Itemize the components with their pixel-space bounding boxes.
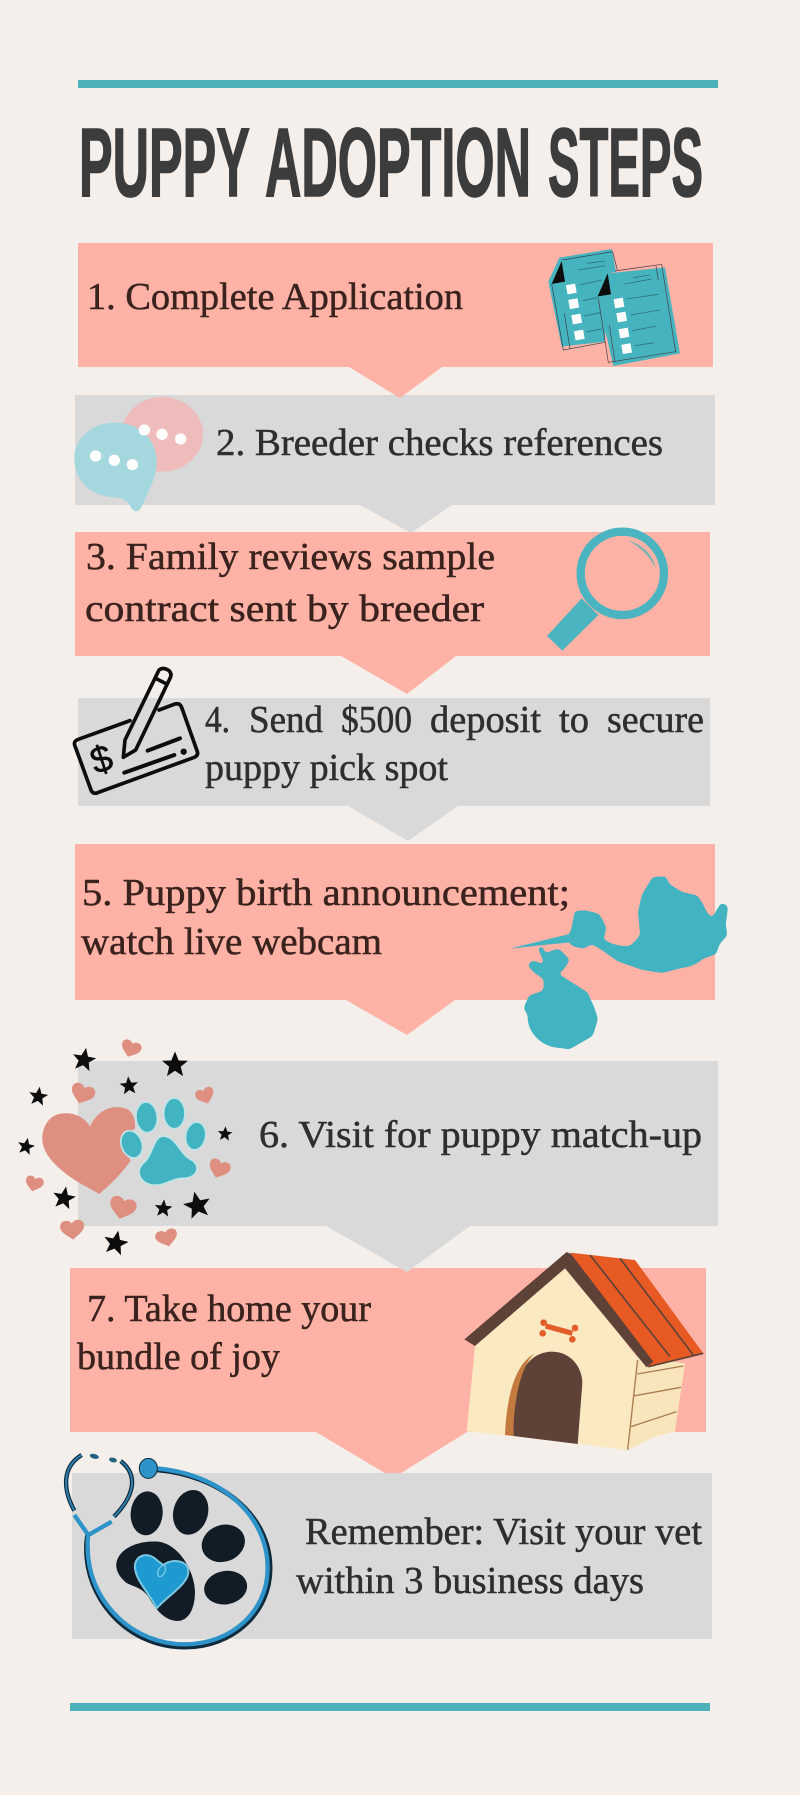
large heart [42,1107,135,1194]
step 7 text [77,1288,371,1378]
step 4 text: to [559,699,589,741]
icon: stork carrying bundle [512,878,727,1048]
step 4 text: Send [249,699,323,741]
step 5 text [81,872,570,963]
title: ADOPTION [265,108,531,217]
step 4 text: puppy pick spot [205,747,448,789]
step 3 text [85,536,495,630]
panel: step 3 with arrow [75,532,710,694]
bottom teal bar [70,1703,710,1711]
panel: remember [72,1473,712,1639]
step 5 text: 5. Puppy birth announcement; [82,872,570,914]
step 3 text: contract sent by breeder [85,588,484,630]
icon: stethoscope and paw [66,1453,270,1647]
icon: heart and paw with stars [16,1038,233,1256]
icon: chat bubbles [74,397,203,511]
title: PUPPY [79,108,250,217]
paw print [117,1098,208,1185]
icon: cheque and pencil [74,668,198,793]
panel: step 4 with arrow [78,698,710,841]
step 7 text: bundle of joy [77,1336,280,1378]
panel: step 1 with arrow [78,243,713,398]
remember text [296,1511,702,1602]
step 3 text: 3. Family reviews sample [86,536,495,578]
panel: step 5 with arrow [75,844,715,1035]
step 4 text: deposit [430,699,541,741]
small hearts [23,1038,232,1249]
icon: dog house [464,1252,703,1450]
step 5 text: watch live webcam [81,921,382,963]
panel: step 2 with arrow [75,395,715,533]
step 4 text: secure [607,699,704,741]
icon: magnifying glass [547,532,664,651]
step 2 text: 2. Breeder checks references [216,422,663,464]
stars [16,1046,233,1256]
remember text: within 3 business days [296,1560,644,1602]
step 4 text: $500 [341,699,412,741]
step 7 text: 7. Take home your [87,1288,371,1330]
step 4 text [205,699,704,789]
step 4 text: 4. [205,699,230,741]
icon: cheque and pencil: $ [85,736,118,782]
step 1 text: 1. Complete Application [87,276,463,318]
icon: application documents [548,249,680,366]
remember text: Remember: Visit your vet [305,1511,702,1553]
step 6 text: 6. Visit for puppy match-up [259,1114,702,1156]
panel: step 6 with arrow [78,1061,718,1272]
top teal bar [78,80,718,88]
panel: step 7 with arrow [70,1268,706,1478]
